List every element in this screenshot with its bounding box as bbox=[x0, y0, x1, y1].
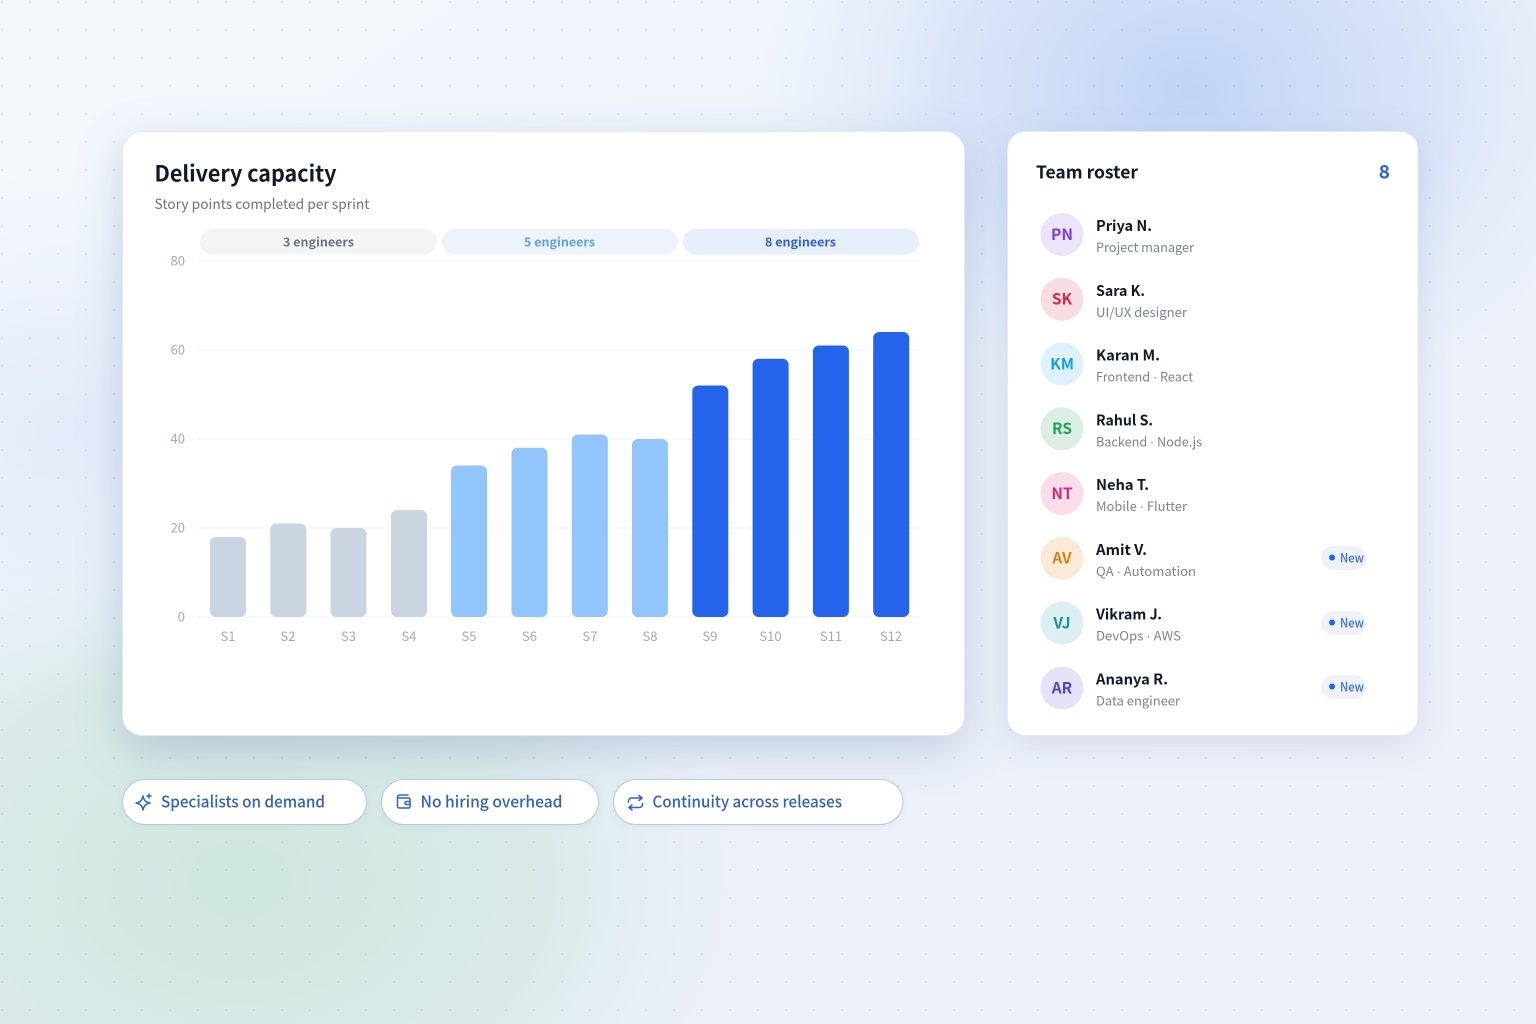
roster row: Vikram J.: VJ bbox=[1052, 611, 1071, 633]
bar chart: 60 bbox=[171, 340, 185, 358]
bar chart: S5 bbox=[462, 626, 476, 645]
roster row: Vikram J.: Vikram J. bbox=[1095, 604, 1162, 624]
roster row: Amit V. bbox=[1040, 537, 1366, 580]
bar chart: S12 bbox=[880, 626, 902, 645]
roster row: Priya N.: Priya N. bbox=[1096, 215, 1152, 236]
new badge bbox=[1321, 611, 1366, 635]
new badge: New bbox=[1340, 612, 1365, 632]
chip: specialists on demand bbox=[122, 780, 366, 824]
bar chart: S1 bbox=[221, 626, 235, 645]
bar chart: S6 bbox=[522, 626, 537, 645]
team size pills: 5 engineers bbox=[524, 234, 595, 250]
bar chart: S3 bbox=[341, 626, 356, 645]
roster row: Karan M.: KM bbox=[1050, 352, 1074, 374]
team size pills bbox=[200, 229, 919, 254]
roster row: Ananya R. bbox=[1040, 666, 1366, 710]
roster row: Rahul S.: Rahul S. bbox=[1096, 409, 1153, 430]
chip: continuity across releases: Continuity across releases bbox=[652, 788, 842, 812]
bar chart: 20 bbox=[171, 518, 185, 536]
chip: continuity across releases bbox=[614, 780, 903, 824]
chip: specialists on demand: Specialists on demand bbox=[161, 788, 325, 812]
roster row: Vikram J. bbox=[1040, 602, 1366, 644]
roster row: Amit V.: Amit V. bbox=[1095, 539, 1147, 560]
roster row: Karan M.: Frontend · React bbox=[1096, 366, 1193, 386]
chip: no hiring overhead: No hiring overhead bbox=[420, 788, 562, 812]
roster row: Priya N.: PN bbox=[1051, 223, 1073, 245]
roster row: Vikram J.: DevOps · AWS bbox=[1096, 626, 1181, 644]
panel: delivery capacity bbox=[122, 132, 964, 736]
icon: wallet bbox=[398, 795, 410, 808]
team size pills: 3 engineers bbox=[283, 234, 354, 250]
bar chart: 0 bbox=[178, 606, 185, 626]
roster row: Ananya R.: Data engineer bbox=[1096, 690, 1181, 710]
roster row: Amit V.: QA · Automation bbox=[1096, 561, 1196, 580]
roster row: Amit V.: AV bbox=[1051, 547, 1072, 569]
bar chart: S7 bbox=[583, 626, 597, 645]
roster row: Neha T.: Neha T. bbox=[1096, 474, 1149, 495]
new badge bbox=[1321, 675, 1366, 699]
bar chart: 80 bbox=[171, 250, 185, 270]
roster row: Rahul S.: Backend · Node.js bbox=[1096, 431, 1202, 450]
team size pills: 8 engineers bbox=[765, 234, 836, 250]
bar chart: S2 bbox=[281, 626, 295, 645]
bar chart: S9 bbox=[703, 626, 717, 645]
roster row: Neha T.: Mobile · Flutter bbox=[1096, 496, 1188, 515]
roster row: Ananya R.: Ananya R. bbox=[1095, 668, 1168, 690]
roster row: Priya N.: Project manager bbox=[1096, 237, 1195, 256]
icon: sparkles bbox=[136, 794, 151, 810]
team count: 8 bbox=[1379, 158, 1390, 184]
bar chart: S10 bbox=[759, 626, 782, 645]
chip: no hiring overhead bbox=[382, 780, 598, 824]
roster row: Sara K.: SK bbox=[1052, 288, 1073, 310]
heading: delivery capacity: Delivery capacity bbox=[154, 156, 337, 188]
heading: team roster: Team roster bbox=[1036, 160, 1138, 184]
roster row: Sara K. bbox=[1040, 278, 1188, 321]
panel: team roster bbox=[1008, 132, 1418, 736]
bar chart bbox=[171, 250, 920, 645]
bar chart: S4 bbox=[402, 626, 416, 645]
roster row: Neha T.: NT bbox=[1051, 482, 1073, 504]
bar chart: 40 bbox=[171, 428, 185, 448]
roster row: Rahul S. bbox=[1040, 407, 1202, 450]
new badge: New bbox=[1340, 676, 1365, 696]
roster row: Rahul S.: RS bbox=[1052, 417, 1072, 439]
bar chart: S8 bbox=[643, 626, 657, 645]
roster row: Neha T. bbox=[1040, 472, 1188, 515]
subheading: story points: Story points completed per sprint bbox=[154, 194, 370, 214]
roster row: Sara K.: Sara K. bbox=[1096, 280, 1145, 301]
roster row: Ananya R.: AR bbox=[1051, 676, 1073, 698]
roster row: Priya N. bbox=[1040, 213, 1195, 256]
new badge bbox=[1321, 546, 1366, 570]
roster row: Karan M.: Karan M. bbox=[1096, 344, 1160, 366]
roster row: Karan M. bbox=[1040, 342, 1193, 386]
roster row: Sara K.: UI/UX designer bbox=[1096, 302, 1188, 321]
icon: repeat arrows bbox=[628, 796, 642, 810]
new badge: New bbox=[1340, 548, 1365, 566]
bar chart: S11 bbox=[820, 626, 842, 645]
